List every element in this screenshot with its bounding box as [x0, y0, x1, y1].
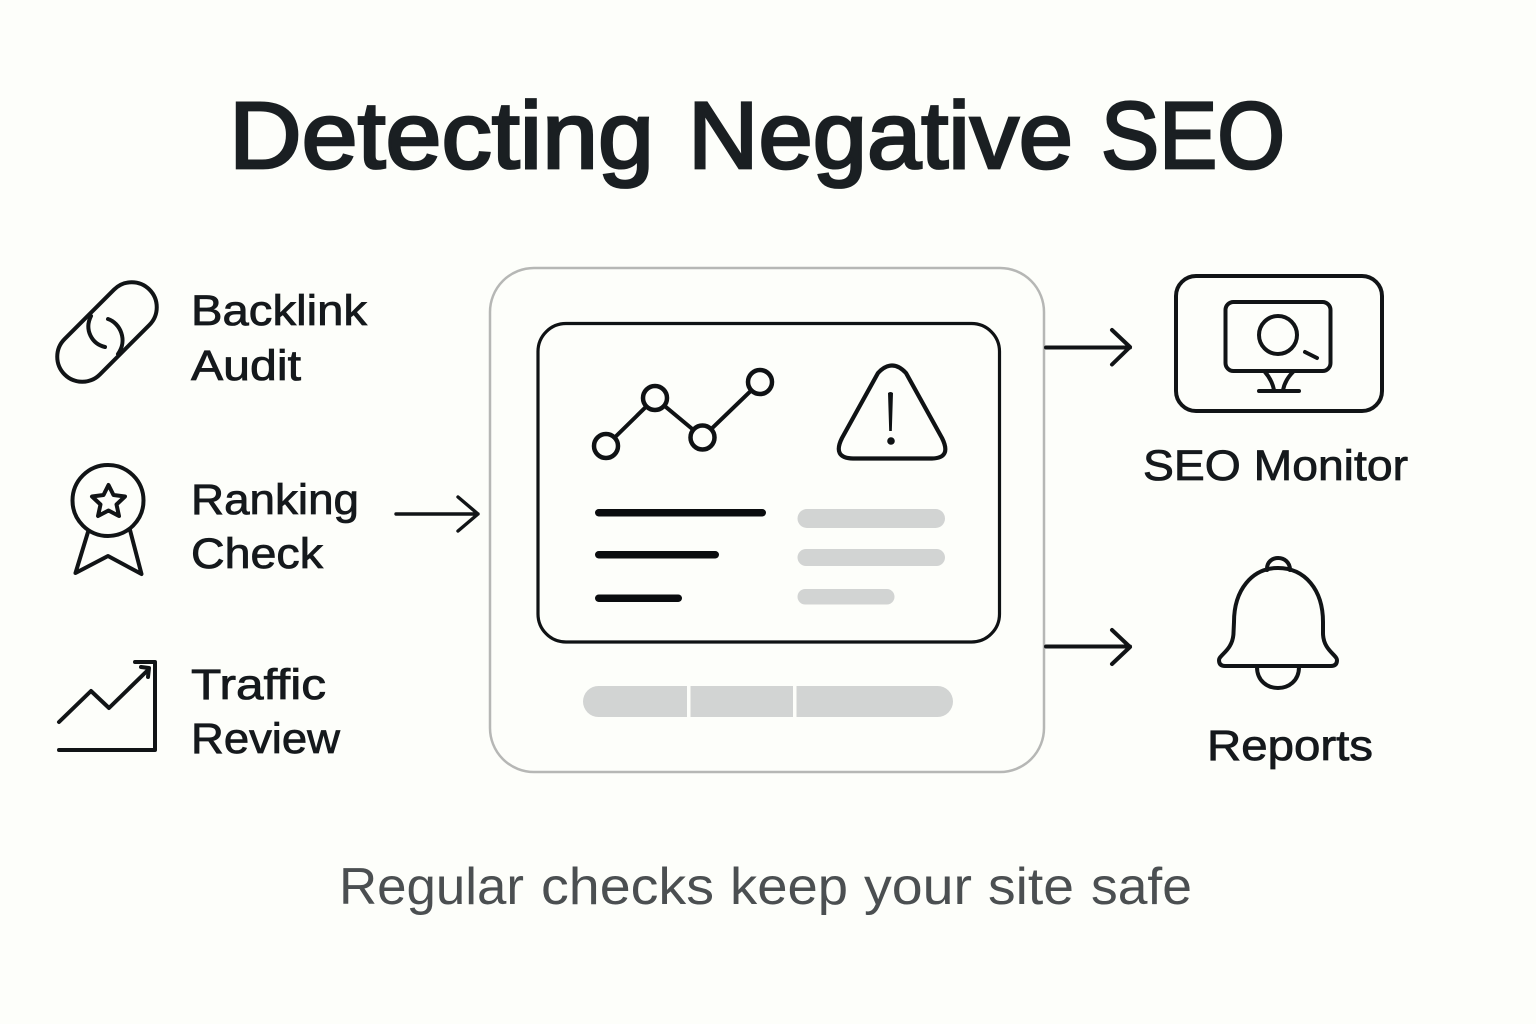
segmented grey bar — [583, 685, 953, 718]
footer caption: safe — [1091, 858, 1192, 916]
dark text lines — [595, 509, 766, 602]
title: Negative — [688, 83, 1073, 189]
label: traffic review: Traffic — [191, 661, 326, 709]
icon: chain link — [47, 272, 167, 392]
label: backlink audit — [191, 287, 368, 390]
label: reports: Reports — [1207, 722, 1373, 770]
line chart — [594, 370, 772, 458]
label: traffic review — [191, 661, 341, 763]
item: traffic review — [59, 661, 341, 763]
arrow: dashboard to reports — [1046, 630, 1130, 664]
title: SEO — [1101, 83, 1285, 189]
item: SEO monitor — [1143, 276, 1408, 490]
title: Detecting — [229, 83, 654, 189]
icon: notification bell — [1219, 558, 1337, 688]
grey placeholder bars — [798, 509, 945, 604]
label: backlink audit: Audit — [191, 342, 301, 390]
item: backlink audit — [47, 272, 368, 392]
item: ranking check — [72, 465, 359, 578]
arrow: dashboard to SEO monitor — [1046, 330, 1130, 364]
item: reports — [1207, 558, 1373, 770]
panel: dashboard card — [490, 268, 1044, 772]
arrow: inputs to dashboard — [396, 497, 478, 531]
footer caption: Regular — [339, 858, 524, 916]
footer caption: checks — [541, 858, 714, 916]
footer caption: keep — [730, 858, 848, 916]
footer caption: your — [864, 858, 972, 916]
label: SEO monitor: SEO Monitor — [1143, 442, 1408, 490]
footer caption: site — [988, 858, 1074, 916]
label: ranking check: Check — [191, 530, 324, 578]
inner screen — [538, 324, 1000, 642]
label: ranking check — [191, 476, 359, 578]
icon: monitor with magnifier — [1176, 276, 1382, 411]
footer caption — [339, 858, 1192, 916]
icon: rising traffic chart — [59, 662, 155, 750]
card outline — [490, 268, 1044, 772]
title — [229, 83, 1285, 189]
icon: warning triangle — [839, 366, 945, 458]
label: backlink audit: Backlink — [191, 287, 368, 335]
icon: award medal — [72, 465, 144, 574]
label: traffic review: Review — [191, 715, 341, 763]
label: ranking check: Ranking — [191, 476, 359, 524]
